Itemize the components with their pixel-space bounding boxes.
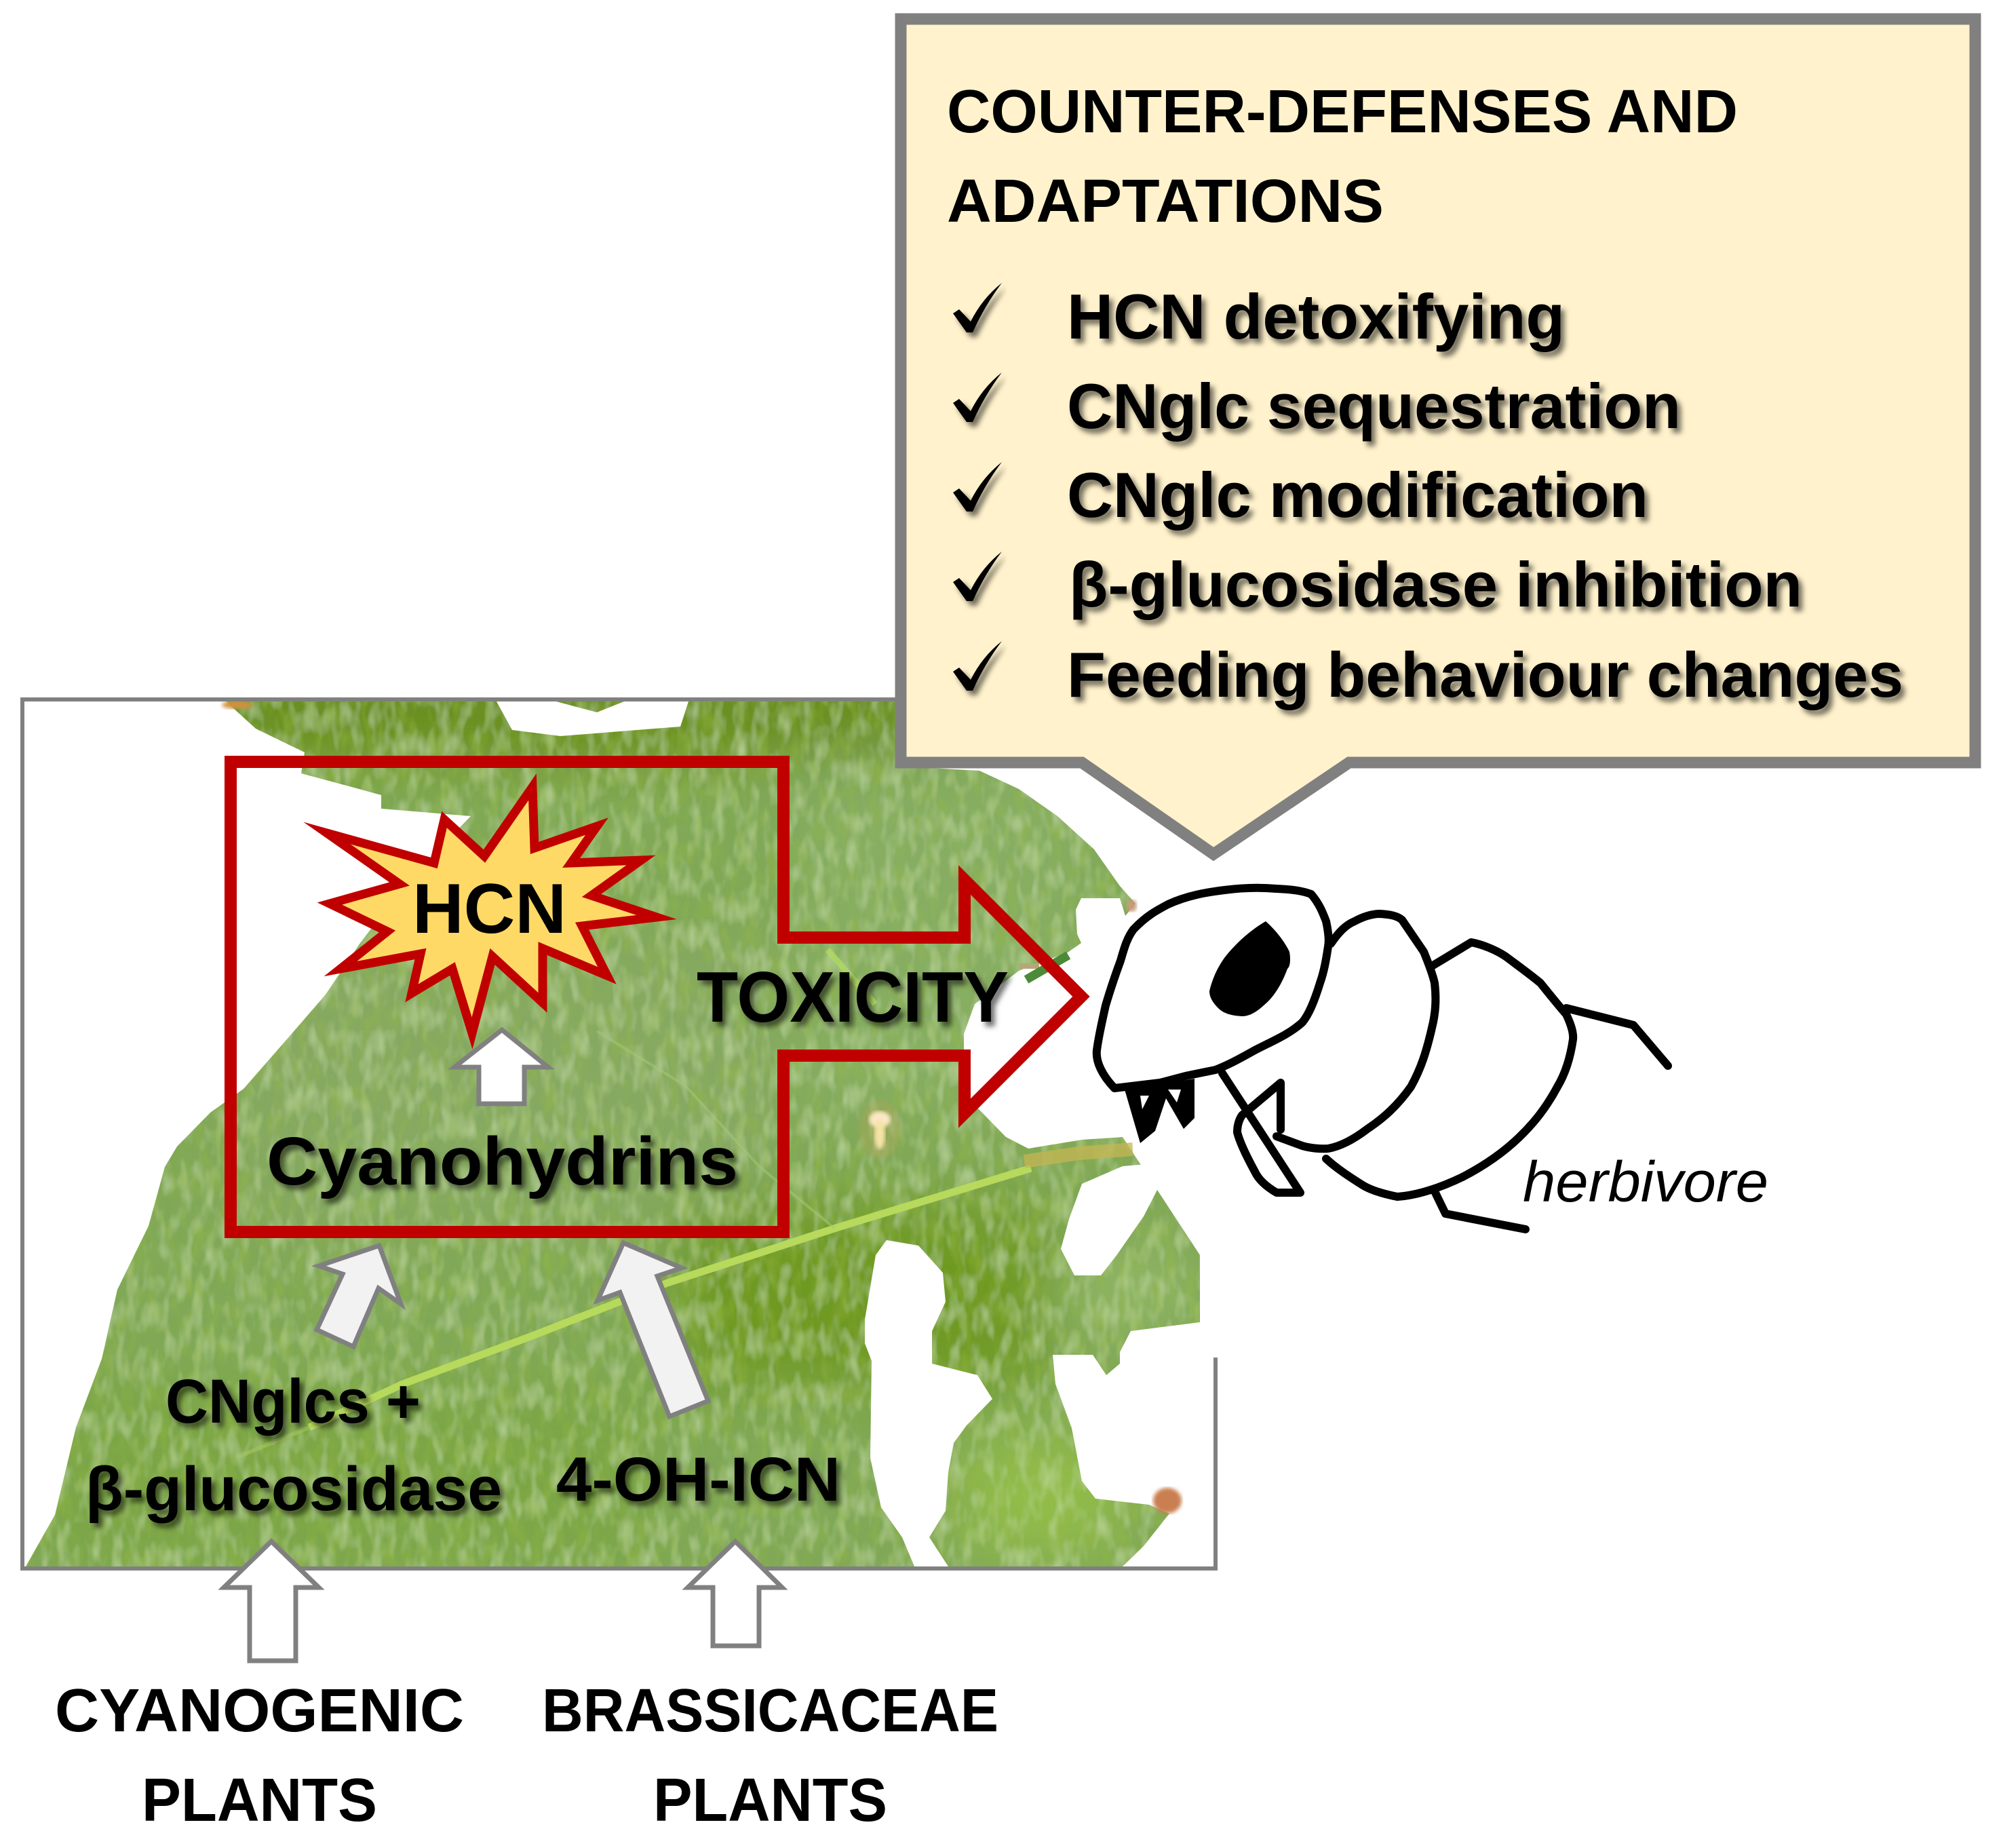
icon: check marks: [953, 283, 1002, 691]
label: cyanogenic plants: CYANOGENIC: [55, 1677, 464, 1745]
list of adaptations: β-glucosidase inhibition: [1069, 549, 1802, 620]
leaf blemishes: [222, 701, 1182, 1514]
text: 4-OH-ICN: 4-OH-ICN: [556, 1445, 840, 1514]
label: brassicaceae plants: [542, 1677, 998, 1834]
label: cyanogenic plants: PLANTS: [142, 1767, 377, 1834]
herbivore teeth: [1125, 1079, 1194, 1143]
callout heading: [947, 78, 1738, 235]
arrow: CNglcs to cyanohydrins: [317, 1246, 401, 1347]
icon: HCN explosion: [327, 787, 657, 1033]
label: brassicaceae plants: PLANTS: [653, 1767, 887, 1834]
herbivore abdomen: [1326, 942, 1573, 1197]
panel: counter-defenses callout: [901, 19, 1975, 854]
text: toxicity: TOXICITY: [697, 957, 1009, 1037]
herbivore eye: [1209, 921, 1290, 1016]
arrow: cyanogenic plants: [224, 1541, 319, 1661]
leaf veins: [237, 950, 1133, 1457]
text: CNglcs + beta-glucosidase: [85, 1367, 502, 1524]
list of adaptations: CNglc sequestration: [1067, 370, 1681, 442]
text: cyanohydrins: Cyanohydrins: [267, 1123, 738, 1199]
label: brassicaceae plants: BRASSICACEAE: [542, 1677, 998, 1745]
herbivore thorax: [1277, 914, 1435, 1149]
list of adaptations: HCN detoxifying: [1067, 281, 1565, 352]
callout heading: ADAPTATIONS: [947, 168, 1384, 235]
herbivore legs: [1566, 1008, 1668, 1066]
list of adaptations: CNglc modification: [1067, 459, 1648, 531]
leaf holes: [497, 701, 1157, 1566]
list of adaptations: [1067, 281, 1903, 710]
callout heading: COUNTER-DEFENSES AND: [947, 78, 1738, 146]
panel: leaf photo: [0, 665, 1235, 1587]
HCN label: HCN: [412, 870, 566, 948]
herbivore mandible: [1222, 1073, 1300, 1193]
text: CNglcs + beta-glucosidase: CNglcs +: [166, 1367, 421, 1436]
herbivore illustration: [1097, 888, 1668, 1229]
label: cyanogenic plants: [55, 1677, 464, 1834]
red toxicity arrow: [231, 762, 1081, 1232]
label: herbivore: herbivore: [1523, 1150, 1768, 1214]
arrow: brassicaceae plants: [688, 1541, 782, 1646]
arrow: 4-OH-ICN to cyanohydrins: [598, 1243, 708, 1417]
arrow: cyanohydrins to HCN: [454, 1030, 548, 1104]
photo frame: [22, 699, 1216, 1568]
list of adaptations: Feeding behaviour changes: [1067, 639, 1903, 710]
herbivore head: [1097, 888, 1329, 1088]
leaf shape: [26, 701, 1200, 1566]
text: CNglcs + beta-glucosidase: β-glucosidase: [85, 1455, 502, 1524]
